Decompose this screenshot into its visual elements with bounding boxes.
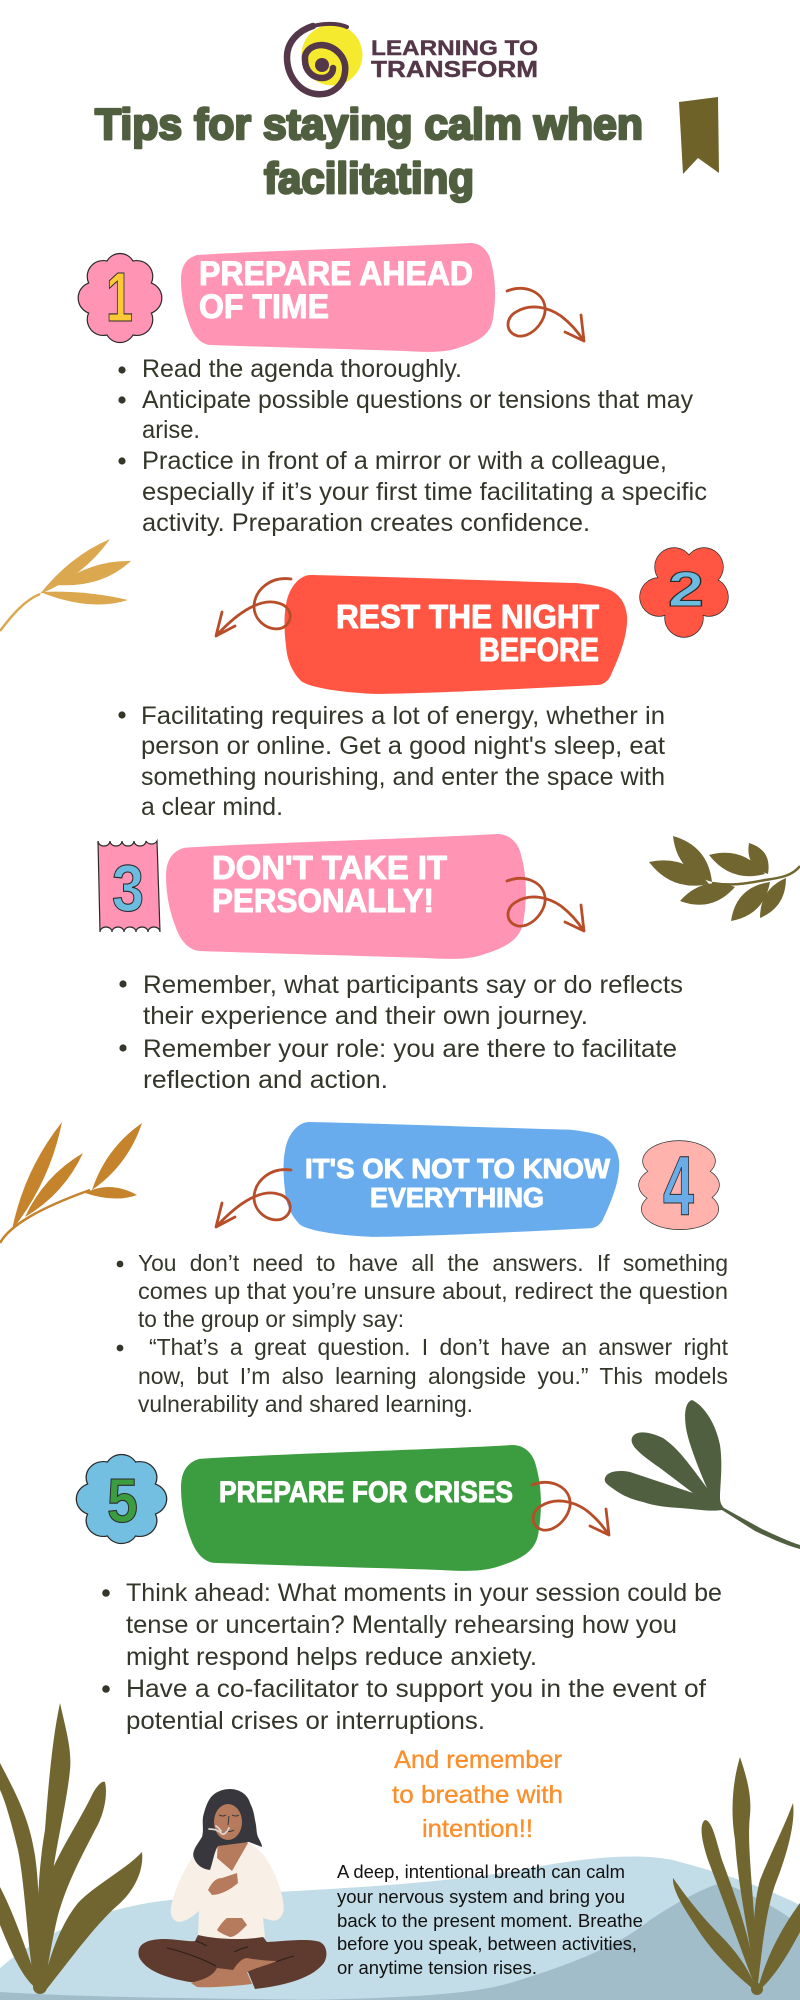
text: step 1 bullets: arise. <box>142 416 200 444</box>
text: step 1 bullets: Anticipate possible questions or tensions that may <box>142 386 693 414</box>
panel: step 3 <box>98 834 683 1094</box>
text: step 3 bullets: reflection and action. <box>143 1066 388 1094</box>
text: step 3 bullets: their experience and their own journey. <box>143 1002 588 1030</box>
heading: rest the night before: BEFORE <box>479 631 599 668</box>
text: deep breath paragraph: before you speak, between activities, <box>337 1934 637 1954</box>
icon: number 5 flower <box>76 1454 167 1544</box>
text: deep breath paragraph: back to the present moment. Breathe <box>337 1911 643 1931</box>
text: step 2 bullet: Facilitating requires a lot of energy, whether in <box>141 702 665 730</box>
icon: number 4 badge <box>638 1139 720 1233</box>
panel: step 2 <box>118 547 729 821</box>
icon: number 5 flower: 5 <box>107 1467 138 1536</box>
text: step 5 bullets: might respond helps reduce anxiety. <box>126 1643 537 1671</box>
heading: rest the night before: REST THE NIGHT <box>336 598 599 635</box>
text: step 5 bullets <box>102 1579 722 1735</box>
logo: Learning to Transform: LEARNING TO <box>371 37 538 60</box>
heading: prepare ahead of time <box>181 243 495 352</box>
icon: amber leaf sprig <box>0 1122 142 1243</box>
heading: don't take it personally: DON'T TAKE IT <box>212 849 447 886</box>
text: step 4 bullets <box>117 1250 729 1417</box>
panel: step 1 <box>78 243 707 537</box>
heading: don't take it personally: PERSONALLY! <box>212 882 434 919</box>
heading: it's ok not to know everything: EVERYTHING <box>370 1182 544 1213</box>
heading: prepare for crises: PREPARE FOR CRISES <box>219 1476 513 1509</box>
panel: step 4 <box>117 1122 729 1417</box>
logo: Learning to Transform <box>287 24 538 94</box>
text: deep breath paragraph <box>337 1862 643 1978</box>
text: deep breath paragraph: or anytime tension rises. <box>337 1958 537 1978</box>
arrow <box>216 1170 291 1227</box>
callout: and remember to breathe: intention!! <box>422 1815 533 1843</box>
text: deep breath paragraph: A deep, intentional breath can calm <box>337 1862 625 1882</box>
arrow <box>507 878 584 931</box>
text: deep breath paragraph: your nervous system and bring you <box>337 1887 625 1907</box>
icon: number 2 flower <box>639 547 729 638</box>
text: step 1 bullets <box>118 355 707 537</box>
arrow <box>507 288 584 341</box>
text: step 1 bullets: Read the agenda thoroughly. <box>142 355 462 383</box>
text: step 3 bullets: Remember your role: you are there to facilitate <box>143 1035 677 1063</box>
text: step 1 bullets: activity. Preparation creates confidence. <box>142 509 590 537</box>
icon: number 4 badge: 4 <box>663 1139 694 1233</box>
arrow <box>532 1482 609 1535</box>
text: step 4 bullets: now, but I’m also learning alongside you.” This models <box>138 1363 728 1389</box>
text: step 1 bullets: Practice in front of a mirror or with a colleague, <box>142 447 667 475</box>
icon: olive branch <box>649 836 800 921</box>
title: facilitating <box>264 154 474 203</box>
icon: number 3 ticket <box>98 841 160 932</box>
title: Tips for staying calm when <box>95 100 643 149</box>
panel: step 5 <box>76 1445 722 1735</box>
text: step 5 bullets: Have a co-facilitator to support you in the event of <box>126 1675 706 1703</box>
text: step 1 bullets: especially if it’s your first time facilitating a specific <box>142 478 707 506</box>
text: step 4 bullets: to the group or simply say: <box>138 1306 404 1332</box>
heading: prepare ahead of time: OF TIME <box>199 288 329 326</box>
text: step 2 bullet: person or online. Get a good night's sleep, eat <box>141 732 665 760</box>
logo: Learning to Transform: TRANSFORM <box>371 56 538 82</box>
heading: prepare ahead of time: PREPARE AHEAD <box>199 255 473 293</box>
icon: dark green leaf <box>605 1400 800 1549</box>
callout: and remember to breathe: to breathe with <box>392 1781 563 1809</box>
title <box>95 100 643 203</box>
background: hills <box>0 1857 800 2000</box>
heading: it's ok not to know everything <box>284 1122 619 1237</box>
text: step 5 bullets: potential crises or interruptions. <box>126 1707 485 1735</box>
text: step 4 bullets: You don’t need to have all the answers. If something <box>138 1250 728 1276</box>
icon: number 1 flower <box>78 253 162 343</box>
heading: prepare for crises <box>181 1445 541 1571</box>
icon: number 1 flower: 1 <box>106 258 133 336</box>
text: step 5 bullets: tense or uncertain? Mentally rehearsing how you <box>126 1611 677 1639</box>
callout: and remember to breathe <box>392 1746 563 1843</box>
icon: right plant <box>673 1757 800 1995</box>
heading: rest the night before <box>284 575 627 694</box>
text: step 4 bullets: “That’s a great question. I don’t have an answer right <box>149 1334 729 1360</box>
icon: golden leaf sprig <box>0 539 131 631</box>
text: step 5 bullets: Think ahead: What moments in your session could be <box>126 1579 722 1607</box>
arrow <box>216 579 291 636</box>
icon: left plant <box>0 1703 142 1994</box>
text: step 2 bullet: a clear mind. <box>141 793 283 821</box>
icon: number 2 flower: 2 <box>668 563 704 617</box>
text: step 3 bullets <box>119 971 683 1094</box>
icon: number 3 ticket: 3 <box>112 851 144 925</box>
callout: and remember to breathe: And remember <box>394 1746 562 1774</box>
text: step 4 bullets: vulnerability and shared learning. <box>138 1391 473 1417</box>
icon: bookmark ribbon <box>679 97 719 174</box>
text: step 3 bullets: Remember, what participants say or do reflects <box>143 971 683 999</box>
text: step 4 bullets: comes up that you’re unsure about, redirect the question <box>138 1278 728 1304</box>
text: step 2 bullet <box>118 702 665 821</box>
text: step 2 bullet: something nourishing, and enter the space with <box>141 763 665 791</box>
heading: it's ok not to know everything: IT'S OK NOT TO KNOW <box>305 1153 611 1184</box>
illustration: meditating woman <box>138 1789 326 1989</box>
heading: don't take it personally <box>166 834 526 959</box>
